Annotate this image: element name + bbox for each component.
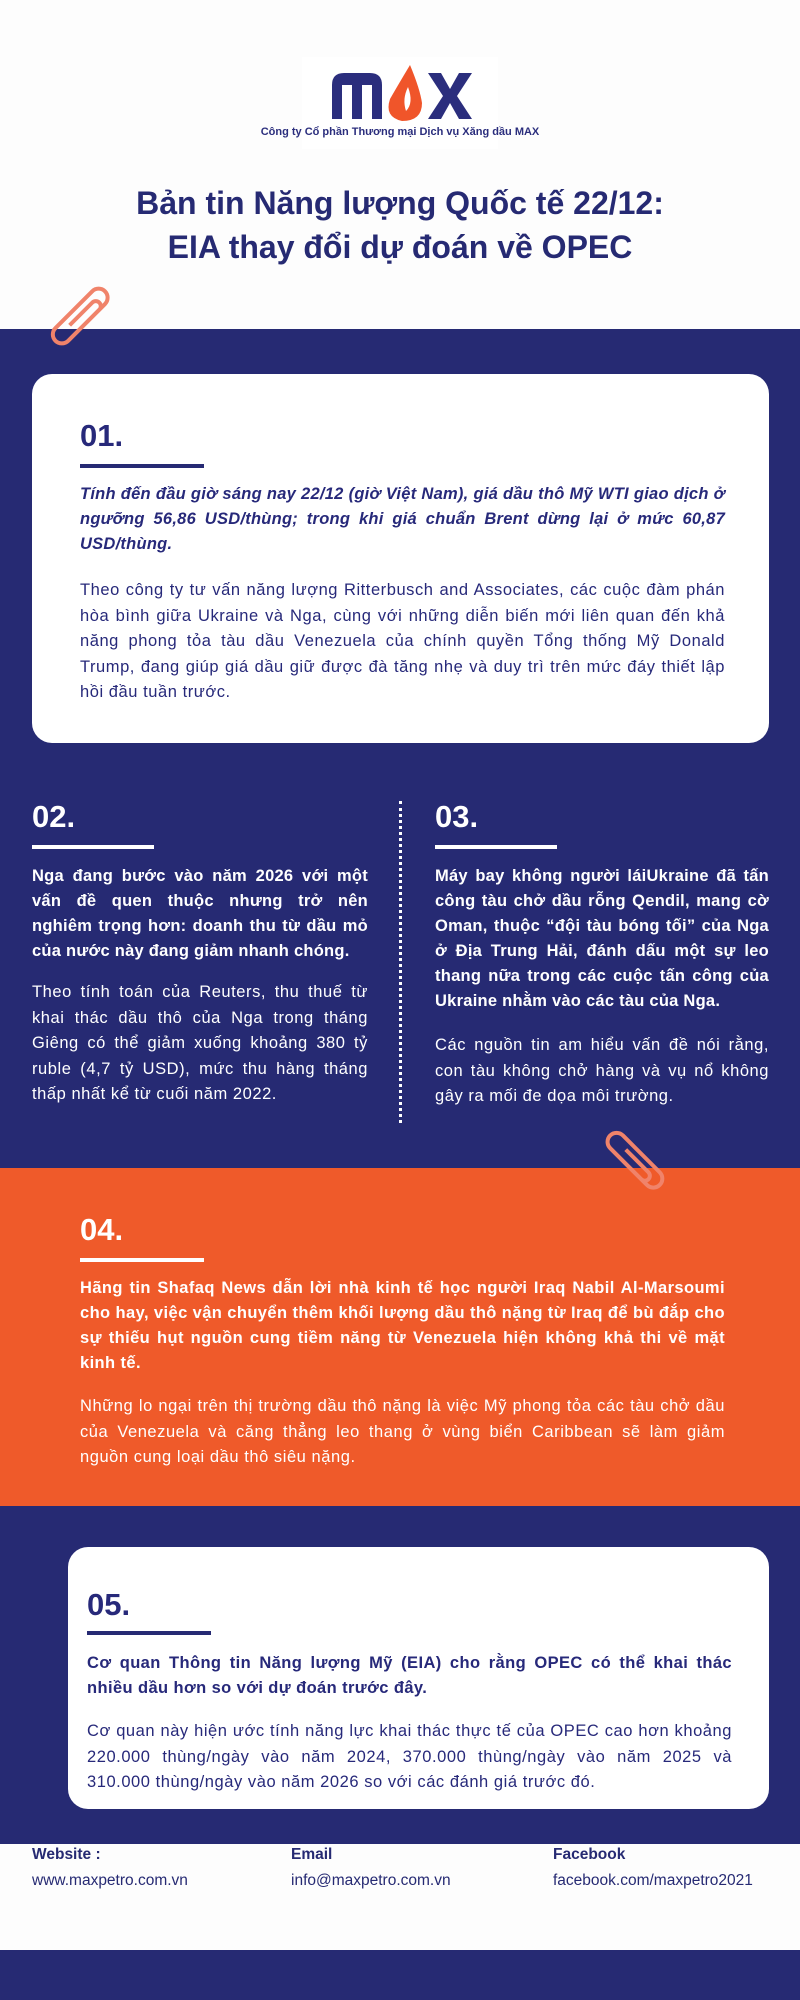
icon: X [428, 73, 472, 119]
icon: M [332, 73, 382, 119]
footer: email [291, 1846, 451, 1889]
text: 04 para: Những lo ngại trên thị trường dầu thô nặng là việc Mỹ phong tỏa các tàu chở dầu của Venezuela và căng thẳng leo thang ở vùng biển Caribbean sẽ làm giảm nguồn cung loại dầu thô siêu nặng. [80, 1397, 725, 1466]
text: 01 bold: Tính đến đầu giờ sáng nay 22/12 (giờ Việt Nam), giá dầu thô Mỹ WTI giao dịch ở ngưỡng 56,86 USD/thùng; trong khi giá chuẩn Brent dừng lại ở mức 60,87 USD/thùng. [80, 485, 725, 553]
company name: Công ty Cổ phần Thương mại Dịch vụ Xăng dầu MAX [261, 126, 539, 138]
panel: 02: 02. [32, 799, 75, 834]
panel: 05: 05. [87, 1587, 130, 1622]
footer: website: www.maxpetro.com.vn [32, 1872, 188, 1889]
title: EIA thay đổi dự đoán về OPEC [168, 229, 632, 265]
title [136, 185, 664, 265]
text: 03 bold: Máy bay không người láiUkraine đã tấn công tàu chở dầu rỗng Qendil, mang cờ Oman, thuộc “đội tàu bóng tối” của Nga ở Địa Trung Hải, đánh dấu một sự leo thang nữa trong các cuộc tấn công của Ukraine nhằm vào các tàu của Nga. [435, 867, 769, 1010]
navy section 2 [0, 1506, 800, 1844]
panel: 02 [32, 799, 368, 1103]
icon: paperclip 1 [50, 286, 110, 346]
footer [32, 1846, 753, 1889]
footer: email: Email [291, 1846, 332, 1863]
text: 05 para: Cơ quan này hiện ước tính năng lực khai thác thực tế của OPEC cao hơn khoảng 220.000 thùng/ngày vào năm 2024, 370.000 thùng/ngày vào năm 2025 và 310.000 thùng/ngày vào năm 2026 so với các đánh giá trước đó. [87, 1722, 732, 1791]
text: 02 para: Theo tính toán của Reuters, thu thuế từ khai thác dầu thô của Nga trong tháng Giêng có thể giảm xuống khoảng 380 tỷ ruble (4,7 tỷ USD), mức thu hàng tháng thấp nhất kể từ cuối năm 2022. [32, 983, 368, 1103]
footer: facebook: Facebook [553, 1846, 625, 1863]
footer: email: info@maxpetro.com.vn [291, 1872, 451, 1889]
panel: 04: 04. [80, 1212, 123, 1247]
panel: 03: 03. [435, 799, 478, 834]
icon: paperclip 2 [606, 1130, 664, 1190]
panel: 01 [32, 374, 769, 743]
footer: website: Website : [32, 1846, 101, 1863]
icon: flame A [388, 65, 422, 121]
panel: 05 [68, 1547, 769, 1809]
navy section 1 [0, 329, 800, 1168]
heading 01: 01. [80, 418, 123, 453]
text: 05 bold: Cơ quan Thông tin Năng lượng Mỹ (EIA) cho rằng OPEC có thể khai thác nhiều dầu hơn so với dự đoán trước đây. [87, 1654, 732, 1697]
text: 04 bold: Hãng tin Shafaq News dẫn lời nhà kinh tế học người Iraq Nabil Al-Marsoumi cho hay, việc vận chuyển thêm khối lượng dầu thô nặng từ Iraq để bù đắp cho sự thiếu hụt nguồn cung tiềm năng từ Venezuela hiện không khả thi về mặt kinh tế. [80, 1279, 725, 1372]
footer: facebook [553, 1846, 753, 1889]
footer: website [32, 1846, 188, 1889]
panel: 04 [0, 1168, 800, 1506]
title: Bản tin Năng lượng Quốc tế 22/12: [136, 185, 664, 221]
panel: 03 [435, 799, 769, 1105]
footer: facebook: facebook.com/maxpetro2021 [553, 1872, 753, 1889]
text: 03 para: Các nguồn tin am hiểu vấn đề nói rằng, con tàu không chở hàng và vụ nổ không gây ra mối đe dọa môi trường. [435, 1036, 769, 1105]
text: 01 para: Theo công ty tư vấn năng lượng Ritterbusch and Associates, các cuộc đàm phán hòa bình giữa Ukraine và Nga, cùng với những diễn biến mới liên quan đến khả năng phong tỏa tàu dầu Venezuela của chính quyền Tổng thống Mỹ Donald Trump, đang giúp giá dầu giữ được đà tăng nhẹ và duy trì trên mức đáy thiết lập hồi đầu tuần trước. [80, 581, 725, 701]
logo [302, 57, 498, 149]
text: 02 bold: Nga đang bước vào năm 2026 với một vấn đề quen thuộc nhưng trở nên nghiêm trọng hơn: doanh thu từ dầu mỏ của nước này đang giảm nhanh chóng. [32, 867, 368, 960]
